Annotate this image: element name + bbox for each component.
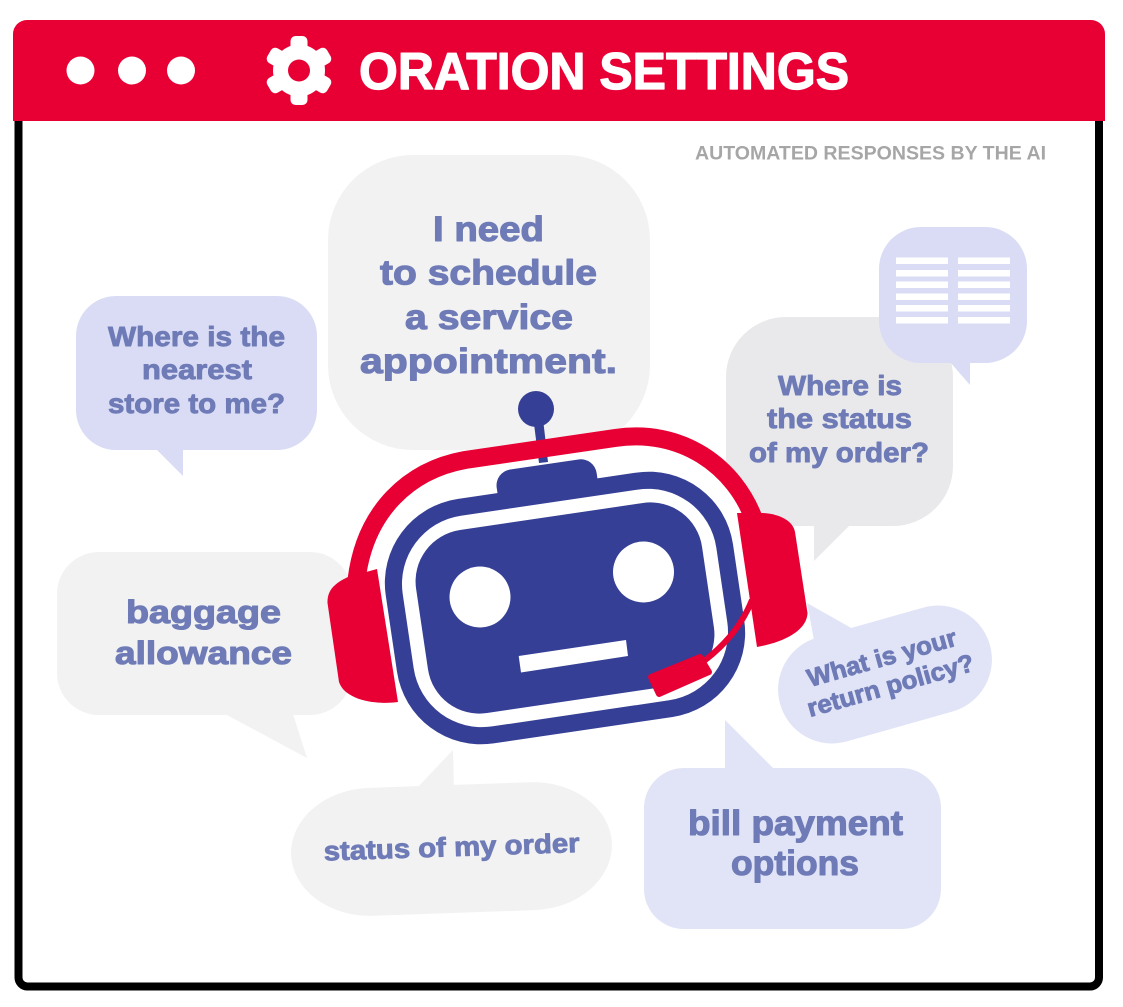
bubble: nearest store: store to me?	[108, 388, 285, 419]
left ear cup	[327, 569, 398, 703]
bubble: order status question	[726, 317, 953, 561]
icon: gear	[265, 36, 333, 105]
bubble: nearest store: Where is the	[108, 321, 285, 352]
eyes	[450, 542, 674, 628]
header bar	[13, 20, 1105, 121]
window dots	[66, 56, 195, 84]
title: ORATION SETTINGS	[359, 43, 849, 101]
mouth	[519, 640, 628, 672]
bubble: nearest store	[76, 296, 317, 476]
bubble: text lines icon	[879, 227, 1027, 385]
bubble: status of my order	[289, 750, 614, 919]
bubble: baggage allowance: allowance	[115, 635, 292, 671]
bubble: order status question: of my order?	[749, 437, 929, 468]
bubble: service appointment: a service	[405, 298, 573, 337]
bubble: service appointment: appointment.	[360, 342, 617, 381]
robot head	[370, 439, 757, 756]
antenna	[518, 391, 554, 463]
bubble: return policy	[765, 593, 1005, 756]
bubble: service appointment: to schedule	[380, 254, 597, 292]
robot with headset	[327, 391, 808, 756]
microphone boom	[704, 600, 752, 661]
bubble: order status question: the status	[767, 403, 912, 434]
bubble: service appointment: I need	[433, 210, 544, 249]
subtitle: AUTOMATED RESPONSES BY THE AI	[695, 144, 1046, 164]
bubble: service appointment	[328, 155, 650, 450]
headband	[356, 436, 755, 580]
bubble: nearest store: nearest	[142, 354, 252, 385]
bubble: baggage allowance	[57, 552, 352, 758]
white area under headband	[356, 437, 770, 740]
right ear cup	[737, 513, 808, 647]
bubble: status of my order: status of my order	[323, 828, 581, 866]
bubble: bill payment: bill payment	[688, 804, 903, 843]
bubble: return policy: return policy?	[804, 649, 977, 723]
bubble: return policy: What is your	[804, 624, 960, 693]
bubble: order status question: Where is	[778, 370, 902, 401]
microphone	[651, 657, 709, 694]
bubble: bill payment: options	[731, 844, 859, 883]
bubble: bill payment	[644, 720, 941, 929]
bubble: baggage allowance: baggage	[126, 594, 281, 630]
